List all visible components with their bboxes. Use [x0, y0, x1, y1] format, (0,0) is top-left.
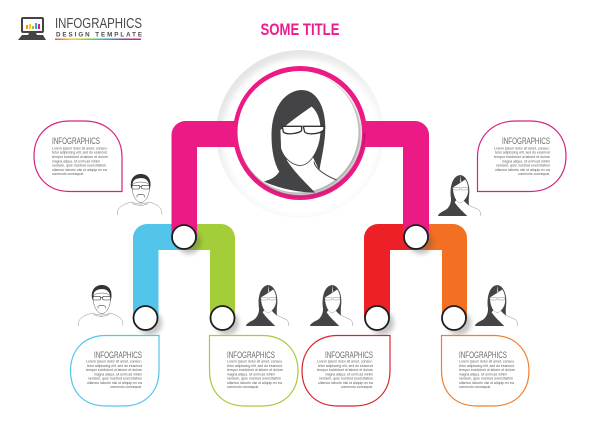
callout: red: INFOGRAPHICS — [325, 350, 373, 360]
callout: green: tetur adipiscing elit, sed do eiusmod — [227, 363, 282, 368]
connector: green branch — [184, 224, 235, 318]
icon: woman with glasses — [264, 90, 337, 193]
connector: blue branch — [133, 224, 184, 318]
node: pink left junction — [172, 225, 201, 254]
central portrait — [233, 66, 367, 200]
callout: orange: ullamco laboris nisi ut aliquip ex ea — [459, 380, 515, 385]
title: SOME TITLE — [260, 20, 340, 39]
callout: orange: tempor incididunt ut labore et dolore — [459, 367, 516, 372]
logo: wordmark — [55, 16, 142, 40]
callout: red — [302, 336, 390, 406]
node: orange — [442, 306, 471, 335]
central portrait halo — [216, 50, 384, 218]
callout: top right — [478, 121, 566, 192]
callout: red: tempor incididunt ut labore et dolore — [317, 367, 374, 372]
node: pink right junction — [404, 225, 433, 254]
callout: top left: magna aliqua. Ut enim ad minim — [52, 158, 101, 163]
callout: blue: magna aliqua. Ut enim ad minim — [94, 371, 143, 376]
callout: top right: tempor incididunt ut labore et dolore — [494, 154, 551, 159]
callout: top left: Lorem ipsum dolor sit amet, consec- — [52, 146, 109, 150]
callout: orange: magna aliqua. Ut enim ad minim — [459, 371, 508, 376]
callout: green: veniam, quis nostrud exercitation — [227, 376, 281, 380]
callout: top right: commodo consequat. — [518, 171, 550, 176]
callout: orange: veniam, quis nostrud exercitation — [459, 376, 513, 380]
callout: blue: INFOGRAPHICS — [94, 350, 142, 360]
logo: wordmark: DESIGN TEMPLATE — [56, 32, 142, 38]
icon: woman top right — [438, 175, 481, 216]
callout: top right: tetur adipiscing elit, sed do eiusmod — [495, 150, 550, 155]
callout: top left: commodo consequat. — [52, 171, 84, 176]
icon: woman above red — [310, 285, 353, 326]
callout: blue: ullamco laboris nisi ut aliquip ex ea — [87, 380, 143, 385]
connector: left pink branch — [172, 121, 250, 240]
callout: orange: commodo consequat. — [459, 384, 491, 389]
node: blue — [134, 306, 162, 335]
callout: blue: veniam, quis nostrud exercitation — [88, 376, 142, 380]
callout: blue: tempor incididunt ut labore et dolore — [86, 367, 143, 372]
callout: blue — [70, 336, 159, 406]
logo: monitor icon — [18, 18, 46, 40]
callout: green — [210, 336, 298, 406]
icon: woman above orange — [475, 285, 518, 326]
callout: top left: tetur adipiscing elit, sed do eiusmod — [52, 150, 107, 155]
callout: orange: INFOGRAPHICS — [459, 350, 507, 360]
icon: woman above green — [246, 285, 289, 326]
callout: red: ullamco laboris nisi ut aliquip ex ea — [318, 380, 374, 385]
node: red — [365, 306, 394, 335]
callout: top right: INFOGRAPHICS — [502, 136, 550, 146]
callout: orange: tetur adipiscing elit, sed do eiusmod — [459, 363, 514, 368]
icon: man top left — [117, 174, 162, 215]
callout: green: commodo consequat. — [227, 384, 259, 389]
callout: blue: commodo consequat. — [110, 384, 142, 389]
callout: green: magna aliqua. Ut enim ad minim — [227, 371, 276, 376]
callout: orange — [442, 336, 529, 406]
callout: green: tempor incididunt ut labore et dolore — [227, 367, 284, 372]
callout: blue: tetur adipiscing elit, sed do eiusmod — [87, 363, 142, 368]
callout: top left: INFOGRAPHICS — [52, 136, 100, 146]
callout: orange: Lorem ipsum dolor sit amet, consec- — [459, 358, 516, 364]
callout: top left: veniam, quis nostrud exercitation — [52, 162, 106, 168]
callout: red: commodo consequat. — [341, 384, 373, 389]
callout: top left: ullamco laboris nisi ut aliquip ex ea — [52, 167, 108, 172]
connector: orange branch — [416, 224, 467, 318]
connector: right pink branch — [350, 121, 429, 240]
callout: blue: Lorem ipsum dolor sit amet, consec- — [86, 358, 143, 364]
callout: top right: ullamco laboris nisi ut aliquip ex ea — [495, 167, 551, 172]
callout: top left — [34, 121, 122, 192]
callout: green: ullamco laboris nisi ut aliquip ex ea — [227, 380, 283, 385]
callout: top right: Lorem ipsum dolor sit amet, consec- — [494, 146, 551, 150]
callout: red: tetur adipiscing elit, sed do eiusmod — [318, 363, 373, 368]
callout: top right: magna aliqua. Ut enim ad minim — [502, 158, 551, 163]
callout: red: veniam, quis nostrud exercitation — [319, 376, 373, 380]
callout: top left: tempor incididunt ut labore et dolore — [52, 154, 109, 159]
node: green — [210, 306, 239, 335]
callout: top right: veniam, quis nostrud exercitation — [496, 162, 550, 168]
connector: red branch — [364, 224, 416, 318]
logo: wordmark: INFOGRAPHICS — [55, 16, 142, 32]
callout: green: Lorem ipsum dolor sit amet, consec- — [227, 358, 284, 364]
callout: red: magna aliqua. Ut enim ad minim — [325, 371, 374, 376]
callout: red: Lorem ipsum dolor sit amet, consec- — [317, 358, 374, 364]
callout: green: INFOGRAPHICS — [227, 350, 275, 360]
icon: man above blue — [78, 285, 123, 326]
